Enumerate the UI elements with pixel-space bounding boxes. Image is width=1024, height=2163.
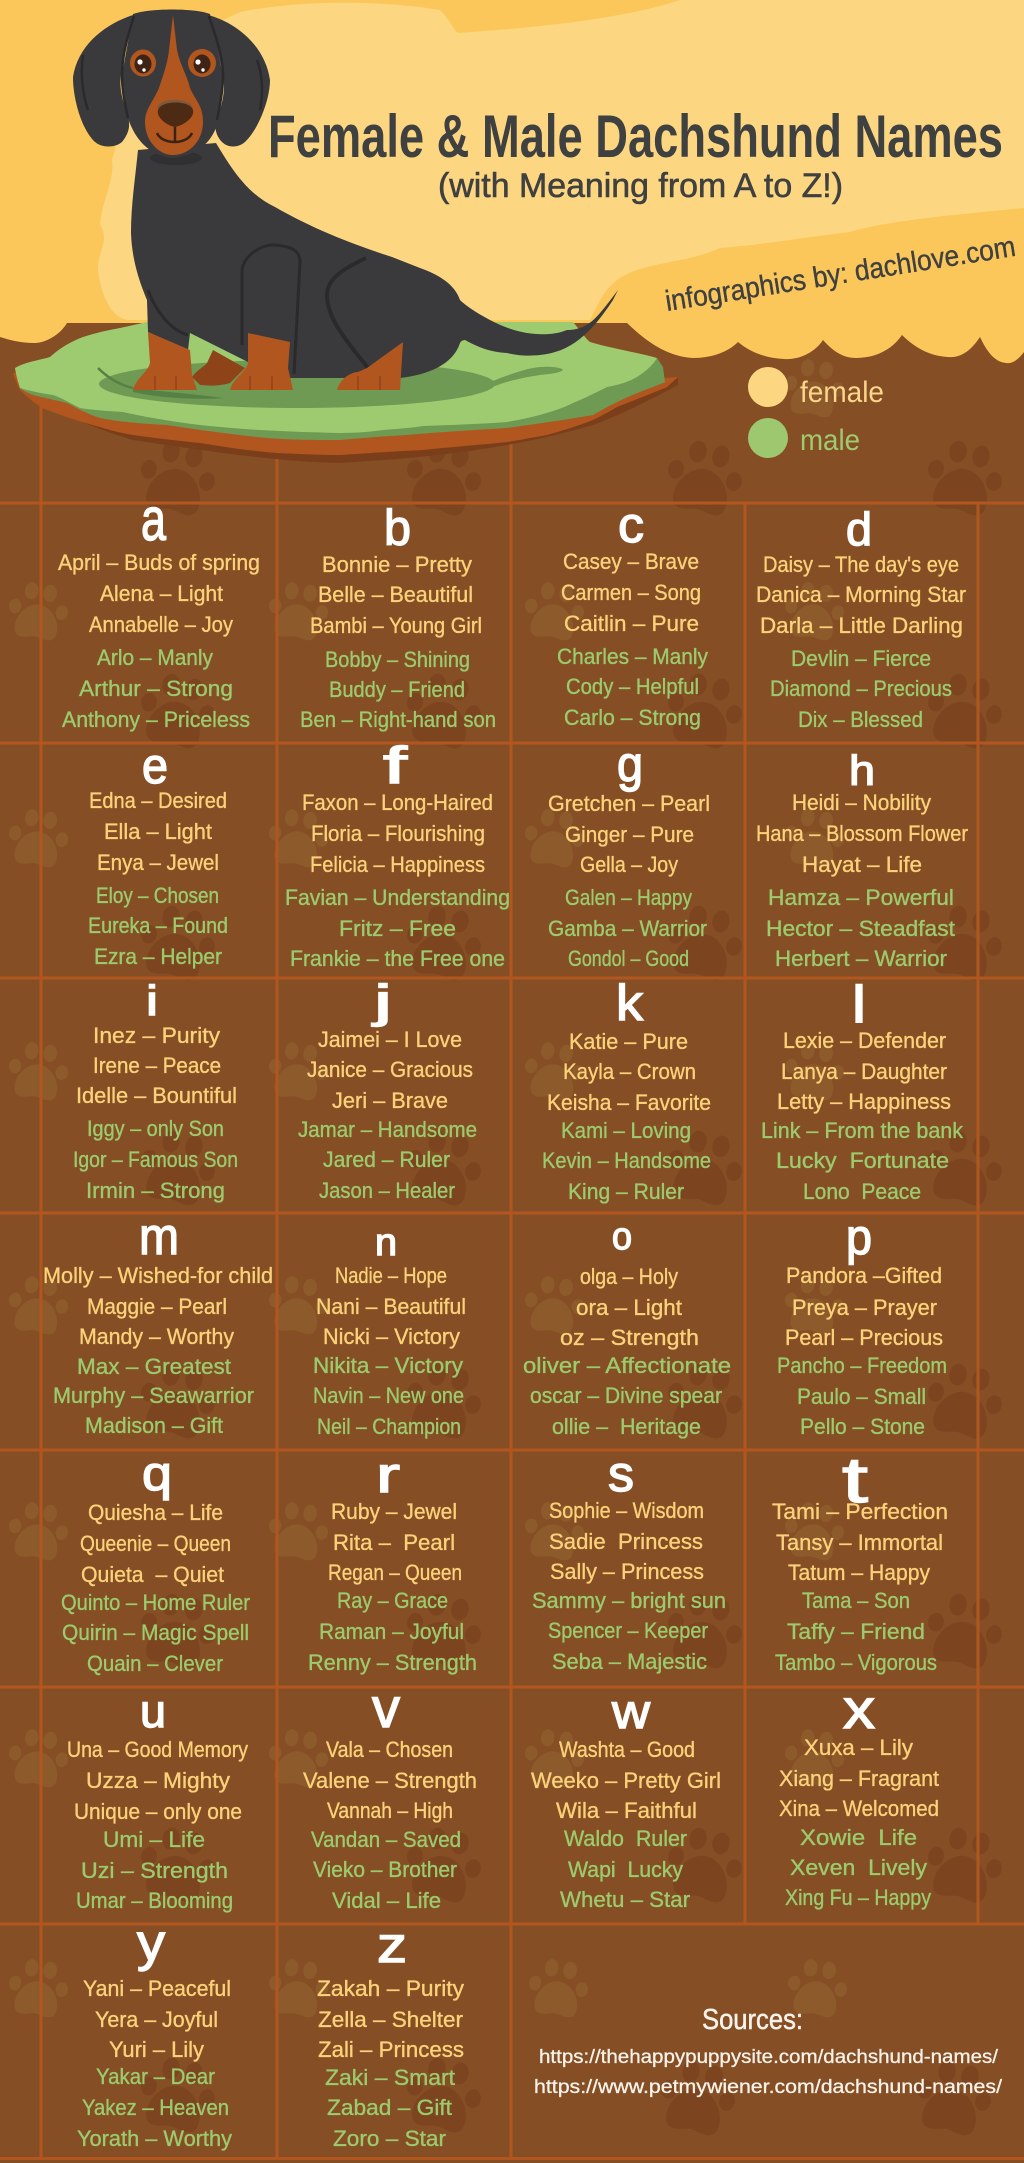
- female names a: Annabelle – Joy: [89, 612, 233, 637]
- cell g: [548, 736, 710, 971]
- male names v: Vandan – Saved: [311, 1827, 461, 1852]
- male names t: Tambo – Vigorous: [775, 1650, 937, 1675]
- female names d: Daisy – The day's eye: [763, 552, 959, 577]
- male names h: Hamza – Powerful: [768, 885, 954, 910]
- female names l: Lexie – Defender: [783, 1028, 946, 1053]
- male names x: Xowie Life: [800, 1825, 917, 1850]
- female names v: Vannah – High: [327, 1798, 453, 1823]
- cell v: [303, 1676, 477, 1913]
- female names m: Molly – Wished-for child: [43, 1263, 273, 1288]
- female names e: [89, 788, 227, 875]
- male names b: Ben – Right-hand son: [300, 707, 496, 732]
- male names z: Zoro – Star: [333, 2126, 446, 2151]
- male names x: [785, 1825, 931, 1910]
- cell w: [531, 1686, 721, 1912]
- female names b: [310, 552, 482, 638]
- male names q: [61, 1590, 250, 1676]
- male names u: Uzi – Strength: [81, 1858, 228, 1883]
- legend: male: male: [800, 424, 860, 457]
- male names t: [775, 1588, 937, 1675]
- male names s: [532, 1588, 726, 1674]
- female names f: Floria – Flourishing: [311, 821, 485, 846]
- female names y: Yera – Joyful: [95, 2007, 218, 2032]
- male names r: Ray – Grace: [337, 1588, 448, 1613]
- male names d: Devlin – Fierce: [791, 646, 931, 671]
- female names r: [328, 1499, 462, 1585]
- light yellow wave behind title: [98, 0, 1024, 320]
- cell k: [542, 975, 711, 1204]
- letter w: w: [611, 1686, 650, 1739]
- cell u: [67, 1685, 248, 1913]
- female names i: Irene – Peace: [93, 1053, 221, 1078]
- male names e: Eloy – Chosen: [96, 883, 219, 908]
- letter b: b: [384, 500, 411, 556]
- male names h: Hector – Steadfast: [766, 916, 955, 941]
- female names a: April – Buds of spring: [58, 550, 260, 575]
- female names f: Faxon – Long-Haired: [302, 790, 493, 815]
- cell n: [313, 1222, 466, 1439]
- cell h: [756, 747, 968, 971]
- female names d: [756, 552, 966, 638]
- letter c: c: [618, 497, 644, 553]
- female names s: Sophie – Wisdom: [549, 1498, 704, 1523]
- male names l: [761, 1118, 964, 1204]
- male names b: [300, 647, 496, 732]
- male names z: [325, 2065, 455, 2151]
- male names o: oscar – Divine spear: [530, 1383, 722, 1408]
- female names e: Edna – Desired: [89, 788, 227, 813]
- cell p: [777, 1209, 947, 1439]
- female names p: Preya – Prayer: [792, 1295, 937, 1320]
- female names i: Inez – Purity: [93, 1023, 220, 1048]
- male names f: Favian – Understanding: [285, 885, 510, 910]
- letter i: i: [146, 977, 158, 1024]
- letter s: s: [608, 1446, 634, 1502]
- female names r: Rita – Pearl: [333, 1530, 455, 1555]
- female names a: [58, 550, 260, 637]
- cell m: [43, 1208, 273, 1438]
- female names w: Wila – Faithful: [556, 1798, 697, 1823]
- letter k: k: [616, 975, 644, 1031]
- female names c: Casey – Brave: [563, 549, 699, 574]
- female names x: Xuxa – Lily: [804, 1735, 913, 1760]
- female names u: Uzza – Mighty: [86, 1768, 230, 1793]
- male names a: Arlo – Manly: [97, 645, 213, 670]
- cell q: [61, 1448, 250, 1676]
- female names c: Carmen – Song: [561, 580, 701, 605]
- male names h: [766, 885, 955, 971]
- female names p: Pandora –Gifted: [786, 1263, 942, 1288]
- female names t: [772, 1499, 948, 1585]
- female names m: Mandy – Worthy: [79, 1324, 234, 1349]
- letter g: g: [617, 736, 643, 792]
- female names g: Ginger – Pure: [565, 822, 694, 847]
- female names z: Zella – Shelter: [318, 2007, 463, 2032]
- letter o: o: [612, 1216, 632, 1258]
- male names p: Pancho – Freedom: [777, 1353, 947, 1378]
- male names l: Lucky Fortunate: [776, 1148, 949, 1173]
- male names f: Frankie – the Free one: [290, 946, 505, 971]
- female names z: [317, 1976, 464, 2062]
- male names k: Kevin – Handsome: [542, 1148, 711, 1173]
- female names m: Maggie – Pearl: [87, 1294, 227, 1319]
- male names i: Irmin – Strong: [86, 1178, 225, 1203]
- female names e: Ella – Light: [104, 819, 212, 844]
- male names t: Tama – Son: [802, 1588, 910, 1613]
- male names n: Nikita – Victory: [313, 1353, 463, 1378]
- male names o: ollie – Heritage: [552, 1414, 701, 1439]
- male names b: Bobby – Shining: [325, 647, 470, 672]
- female names y: [83, 1976, 231, 2062]
- sources: [534, 2004, 1003, 2098]
- female names j: Jeri – Brave: [332, 1088, 448, 1113]
- female names k: Keisha – Favorite: [547, 1090, 711, 1115]
- male names k: King – Ruler: [568, 1179, 684, 1204]
- female names x: [779, 1735, 939, 1821]
- female names i: Idelle – Bountiful: [76, 1083, 237, 1108]
- male names y: [77, 2064, 232, 2151]
- female names l: Lanya – Daughter: [781, 1059, 947, 1084]
- male names e: [88, 883, 228, 969]
- female names r: Ruby – Jewel: [331, 1499, 457, 1524]
- female names p: Pearl – Precious: [785, 1325, 943, 1350]
- legend: [748, 367, 884, 458]
- male names t: Taffy – Friend: [787, 1619, 925, 1644]
- cell e: [88, 738, 228, 969]
- female names s: Sadie Princess: [549, 1529, 703, 1554]
- male names r: Raman – Joyful: [319, 1619, 464, 1644]
- male names g: Gamba – Warrior: [548, 916, 707, 941]
- female names p: [785, 1263, 943, 1350]
- female names x: Xiang – Fragrant: [779, 1766, 939, 1791]
- cell c: [557, 497, 708, 730]
- female names v: Valene – Strength: [303, 1768, 477, 1793]
- female names u: [67, 1737, 248, 1824]
- male names p: Pello – Stone: [800, 1414, 925, 1439]
- male names l: Link – From the bank: [761, 1118, 964, 1143]
- female names t: Tatum – Happy: [788, 1560, 930, 1585]
- male names j: Jamar – Handsome: [298, 1117, 477, 1142]
- letter q: q: [142, 1448, 172, 1501]
- female names l: [777, 1028, 951, 1114]
- male names h: Herbert – Warrior: [775, 946, 947, 971]
- letter h: h: [849, 747, 875, 794]
- male names c: [557, 644, 708, 730]
- female names b: Bonnie – Pretty: [322, 552, 472, 577]
- male names j: [298, 1117, 477, 1203]
- female names n: Nadie – Hope: [335, 1263, 447, 1288]
- male names s: Sammy – bright sun: [532, 1588, 726, 1613]
- female names t: Tami – Perfection: [772, 1499, 948, 1524]
- male names c: Carlo – Strong: [564, 705, 701, 730]
- female names l: Letty – Happiness: [777, 1089, 951, 1114]
- cell l: [761, 976, 964, 1204]
- female names h: Hayat – Life: [802, 852, 922, 877]
- female names s: [549, 1498, 704, 1584]
- female names v: Vala – Chosen: [326, 1737, 453, 1762]
- female names y: Yani – Peaceful: [83, 1976, 231, 2001]
- male names n: Navin – New one: [313, 1383, 464, 1408]
- letter r: r: [376, 1447, 400, 1503]
- cell x: [779, 1677, 939, 1910]
- female names j: Janice – Gracious: [307, 1057, 473, 1082]
- male names o: [523, 1353, 731, 1439]
- male names z: Zaki – Smart: [325, 2065, 455, 2090]
- male names j: Jared – Ruler: [323, 1147, 450, 1172]
- female names o: olga – Holy: [580, 1264, 678, 1289]
- letter j: j: [370, 975, 392, 1027]
- female names k: [547, 1029, 711, 1115]
- male names p: [777, 1353, 947, 1439]
- male names k: [542, 1118, 711, 1204]
- female names g: Gella – Joy: [580, 852, 678, 877]
- male names y: Yakez – Heaven: [82, 2095, 229, 2120]
- male names e: Eureka – Found: [88, 913, 228, 938]
- male names m: Madison – Gift: [85, 1413, 223, 1438]
- male names q: Quinto – Home Ruler: [61, 1590, 250, 1615]
- male names z: Zabad – Gift: [327, 2095, 452, 2120]
- female names s: Sally – Princess: [550, 1559, 704, 1584]
- male names s: Spencer – Keeper: [548, 1618, 708, 1643]
- male names g: Gondol – Good: [568, 946, 689, 971]
- cell y: [77, 1914, 232, 2151]
- male names y: Yakar – Dear: [96, 2064, 215, 2089]
- female names f: [302, 790, 493, 877]
- dachshund illustration: [73, 10, 618, 390]
- male names w: [560, 1826, 690, 1912]
- female names i: [76, 1023, 237, 1108]
- source links: [534, 2047, 1003, 2098]
- cell r: [308, 1447, 477, 1675]
- female names n: Nani – Beautiful: [316, 1294, 466, 1319]
- letter x: x: [843, 1677, 875, 1740]
- male names d: [770, 646, 952, 732]
- male names g: [548, 885, 707, 971]
- female names b: Bambi – Young Girl: [310, 613, 482, 638]
- male names p: Paulo – Small: [797, 1384, 926, 1409]
- male names i: [73, 1116, 238, 1203]
- subtitle: (with Meaning from A to Z!): [438, 167, 843, 205]
- female names u: Unique – only one: [74, 1799, 242, 1824]
- male names k: Kami – Loving: [561, 1118, 691, 1143]
- source links: https://thehappypuppysite.com/dachshund-names/: [539, 2047, 999, 2068]
- letter a: a: [141, 486, 166, 553]
- male names m: Murphy – Seawarrior: [53, 1383, 254, 1408]
- female names q: Quieta – Quiet: [81, 1562, 224, 1587]
- letter v: v: [372, 1676, 400, 1739]
- female names g: Gretchen – Pearl: [548, 791, 710, 816]
- male names c: Charles – Manly: [557, 644, 708, 669]
- yellow scalloped header background: [0, 0, 1024, 363]
- female names v: [303, 1737, 477, 1823]
- cell f: [285, 737, 510, 971]
- male names x: Xeven Lively: [790, 1855, 927, 1880]
- female names h: Heidi – Nobility: [792, 790, 931, 815]
- female names j: Jaimei – I Love: [318, 1027, 462, 1052]
- letter d: d: [846, 503, 872, 555]
- cell b: [300, 500, 496, 732]
- letter f: f: [383, 737, 408, 795]
- male names u: [76, 1827, 233, 1913]
- male names m: Max – Greatest: [77, 1354, 231, 1379]
- male names s: Seba – Majestic: [552, 1649, 707, 1674]
- source links: https://www.petmywiener.com/dachshund-names/: [534, 2077, 1003, 2098]
- female names n: Nicki – Victory: [323, 1324, 460, 1349]
- male names n: [313, 1353, 464, 1439]
- letter p: p: [846, 1209, 872, 1265]
- female names r: Regan – Queen: [328, 1560, 462, 1585]
- cell z: [317, 1917, 464, 2151]
- male names l: Lono Peace: [803, 1179, 921, 1204]
- female names h: [756, 790, 968, 877]
- male names d: Diamond – Precious: [770, 676, 952, 701]
- male names w: Waldo Ruler: [564, 1826, 687, 1851]
- letter t: t: [842, 1444, 868, 1516]
- male names m: [53, 1354, 254, 1438]
- male names f: Fritz – Free: [339, 916, 456, 941]
- female names f: Felicia – Happiness: [310, 852, 485, 877]
- female names d: Darla – Little Darling: [760, 613, 963, 638]
- cell j: [298, 975, 477, 1203]
- female names o: [560, 1264, 699, 1350]
- letter e: e: [142, 738, 168, 794]
- cell i: [73, 977, 238, 1203]
- female names q: Queenie – Queen: [80, 1531, 231, 1556]
- letter y: y: [137, 1914, 165, 1972]
- sources heading: Sources:: [702, 2004, 803, 2036]
- female names n: [316, 1263, 466, 1349]
- male names v: Vieko – Brother: [313, 1857, 457, 1882]
- female names z: Zali – Princess: [318, 2037, 464, 2062]
- female names x: Xina – Welcomed: [779, 1796, 939, 1821]
- male names n: Neil – Champion: [317, 1414, 461, 1439]
- male names a: Arthur – Strong: [79, 676, 233, 701]
- cell o: [523, 1216, 731, 1439]
- female names g: [548, 791, 710, 877]
- male names w: Wapi Lucky: [568, 1857, 683, 1882]
- cell a: [58, 486, 260, 732]
- female names y: Yuri – Lily: [109, 2037, 204, 2062]
- female names b: Belle – Beautiful: [318, 582, 473, 607]
- female names j: [307, 1027, 473, 1113]
- male names r: [308, 1588, 477, 1675]
- female names q: [80, 1500, 231, 1587]
- male names o: oliver – Affectionate: [523, 1353, 731, 1378]
- male names c: Cody – Helpful: [566, 674, 699, 699]
- male names a: [62, 645, 250, 732]
- female names o: oz – Strength: [560, 1325, 699, 1350]
- male names b: Buddy – Friend: [329, 677, 465, 702]
- male names i: Igor – Famous Son: [73, 1147, 238, 1172]
- female names u: Una – Good Memory: [67, 1737, 248, 1762]
- male names r: Renny – Strength: [308, 1650, 477, 1675]
- male names w: Whetu – Star: [560, 1887, 690, 1912]
- cell t: [772, 1444, 948, 1675]
- male names y: Yorath – Worthy: [77, 2126, 232, 2151]
- letter u: u: [140, 1685, 166, 1737]
- male names v: Vidal – Life: [332, 1888, 441, 1913]
- cell d: [756, 503, 966, 732]
- female names q: Quiesha – Life: [88, 1500, 223, 1525]
- female names h: Hana – Blossom Flower: [756, 821, 968, 846]
- female names c: [561, 549, 701, 636]
- female names m: [43, 1263, 273, 1349]
- female names k: Katie – Pure: [569, 1029, 688, 1054]
- male names f: [285, 885, 510, 971]
- male names j: Jason – Healer: [319, 1178, 455, 1203]
- letter n: n: [375, 1222, 397, 1264]
- cell s: [532, 1446, 726, 1674]
- male names v: [311, 1827, 461, 1913]
- female names z: Zakah – Purity: [317, 1976, 464, 2001]
- female names w: Weeko – Pretty Girl: [531, 1768, 721, 1793]
- letter m: m: [139, 1208, 179, 1266]
- male names g: Galen – Happy: [565, 885, 692, 910]
- legend: female: female: [800, 376, 884, 409]
- female names k: Kayla – Crown: [563, 1059, 696, 1084]
- female names w: Washta – Good: [559, 1737, 695, 1762]
- male names q: Quain – Clever: [87, 1651, 223, 1676]
- female names a: Alena – Light: [100, 581, 223, 606]
- female names c: Caitlin – Pure: [564, 611, 699, 636]
- male names i: Iggy – only Son: [87, 1116, 224, 1141]
- male names q: Quirin – Magic Spell: [62, 1620, 249, 1645]
- female names t: Tansy – Immortal: [776, 1530, 943, 1555]
- grass plate: [13, 322, 678, 463]
- female names w: [531, 1737, 721, 1823]
- male names x: Xing Fu – Happy: [785, 1885, 931, 1910]
- letter z: z: [377, 1917, 407, 1973]
- male names u: Umar – Blooming: [76, 1888, 233, 1913]
- male names e: Ezra – Helper: [94, 944, 222, 969]
- letter l: l: [852, 976, 866, 1034]
- female names d: Danica – Morning Star: [756, 582, 966, 607]
- male names a: Anthony – Priceless: [62, 707, 250, 732]
- female names o: ora – Light: [576, 1295, 682, 1320]
- female names e: Enya – Jewel: [97, 850, 219, 875]
- male names d: Dix – Blessed: [798, 707, 923, 732]
- male names u: Umi – Life: [103, 1827, 205, 1852]
